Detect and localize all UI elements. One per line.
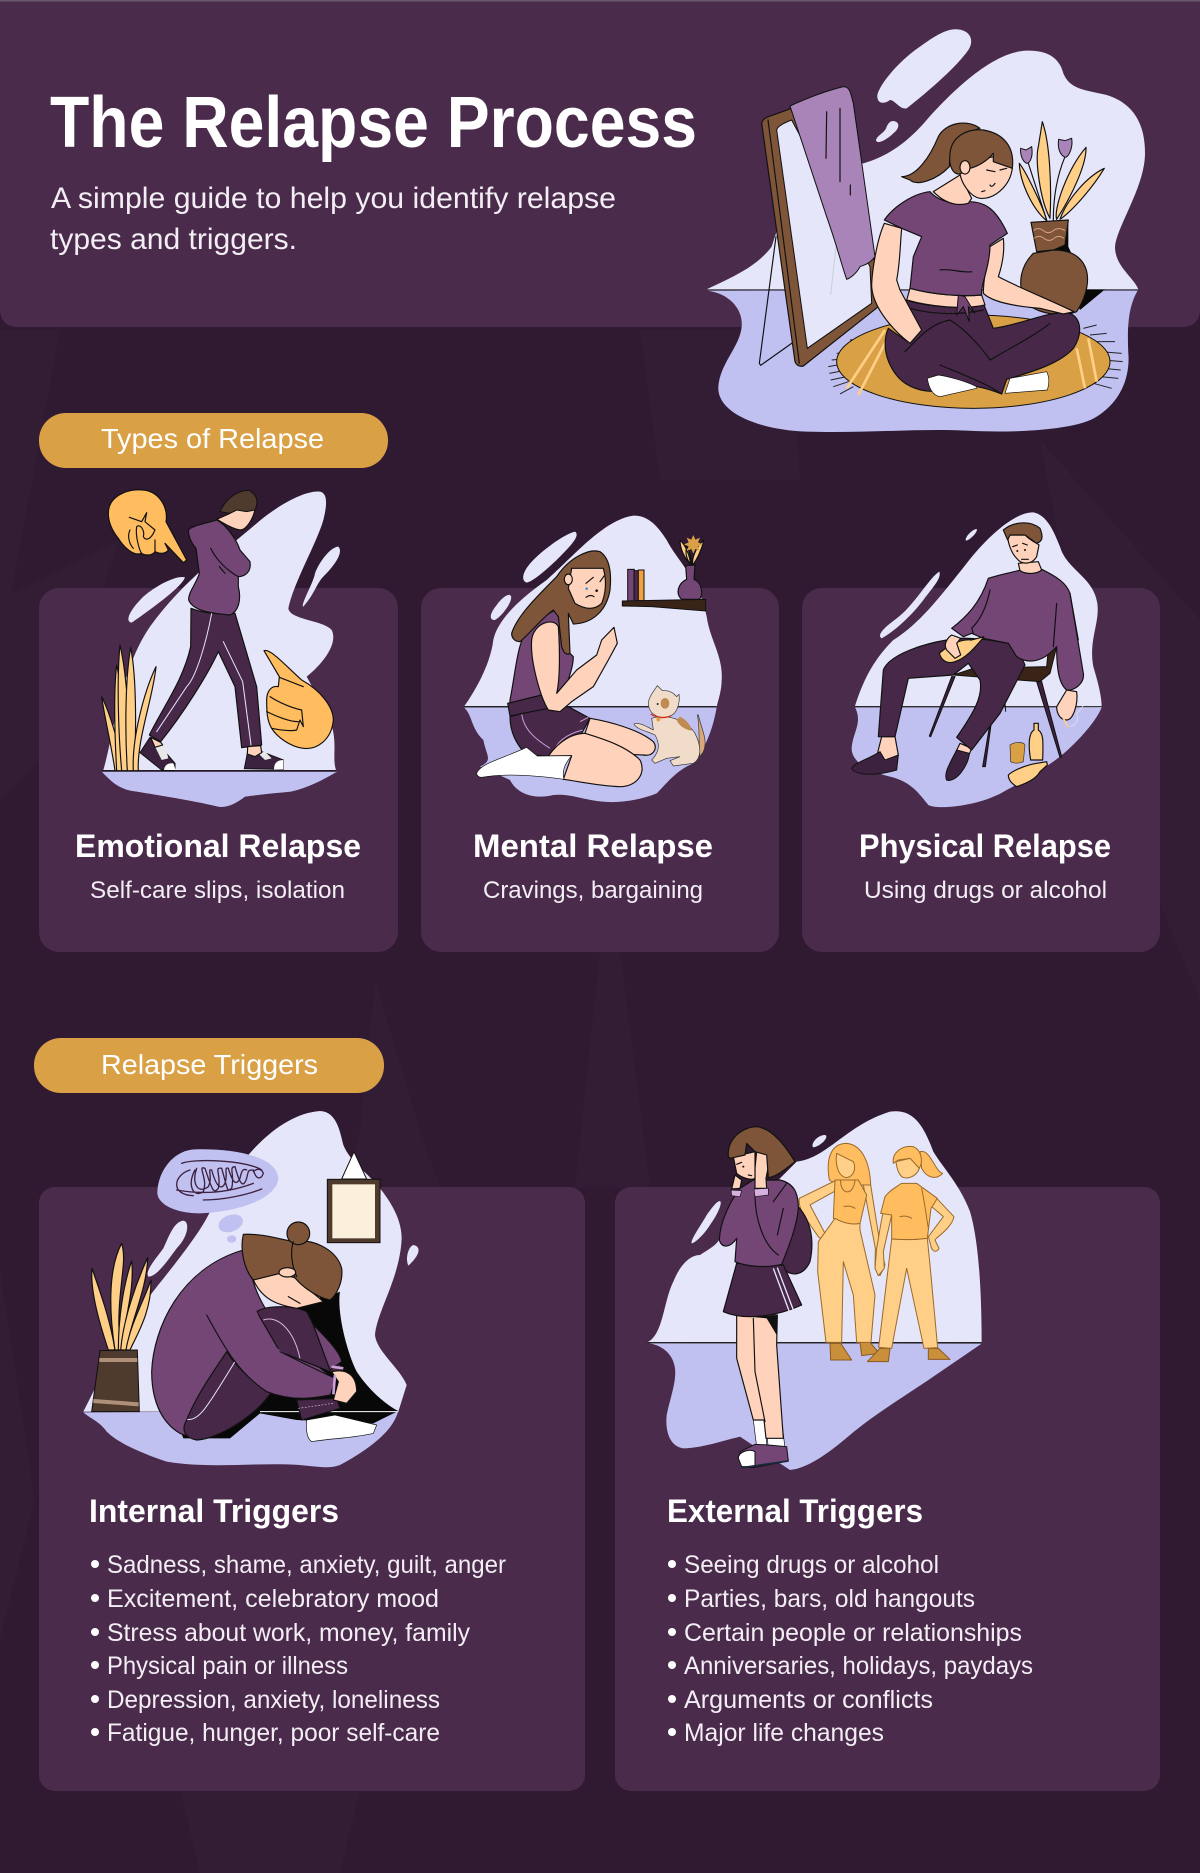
illustration: girl hugging knees with scribble thought [83, 1111, 419, 1467]
chair [929, 610, 1062, 767]
panel: mental relapse [421, 588, 779, 952]
trigger list: Certain people or relationships [684, 1619, 1022, 1647]
seated man [852, 523, 1089, 780]
illustration: woman kneeling with cat [464, 516, 722, 802]
section label: Types of Relapse [39, 413, 388, 468]
plant [102, 645, 156, 771]
panel: external triggers [615, 1187, 1160, 1791]
gossiping woman right [867, 1146, 954, 1362]
panel: emotional relapse [39, 588, 398, 952]
walking man [140, 491, 283, 770]
pointing fist top [108, 490, 187, 563]
header panel [0, 0, 1200, 327]
trigger list: Excitement, celebratory mood [107, 1585, 439, 1613]
covering-ears girl [719, 1127, 802, 1468]
trigger list: Physical pain or illness [107, 1652, 348, 1680]
description: Using drugs or alcohol [864, 877, 1107, 904]
subtitle: A simple guide to help you identify relapse [51, 182, 616, 215]
seated woman [872, 123, 1080, 397]
trigger list [91, 1551, 506, 1747]
trigger list: Parties, bars, old hangouts [684, 1585, 975, 1613]
section label: Relapse Triggers [34, 1038, 384, 1093]
section label: Types of Relapse: Types of Relapse [101, 423, 324, 454]
kneeling woman [477, 551, 655, 787]
rug [828, 315, 1123, 408]
thought bubble [157, 1149, 278, 1243]
shadow [178, 1292, 398, 1438]
title: The Relapse Process [50, 83, 697, 163]
backpack [773, 1205, 812, 1274]
subtitle [50, 182, 616, 256]
description: Self-care slips, isolation [90, 877, 345, 904]
heading: External Triggers [667, 1493, 923, 1529]
trigger list: Fatigue, hunger, poor self-care [107, 1719, 440, 1747]
gossiping woman left [799, 1143, 885, 1360]
trigger list: Anniversaries, holidays, paydays [684, 1652, 1033, 1680]
heading: Emotional Relapse [75, 828, 361, 864]
vase with flowers [1019, 122, 1105, 315]
pointing fist bottom [264, 650, 333, 749]
trigger list: Sadness, shame, anxiety, guilt, anger [107, 1551, 506, 1579]
trigger list: Seeing drugs or alcohol [684, 1551, 939, 1579]
illustration: man on chair with bottles [852, 512, 1102, 807]
illustration: woman sitting by mirror [707, 29, 1145, 432]
crouching girl [152, 1222, 377, 1442]
cat [634, 686, 705, 766]
illustration: walking man with pointing hands [102, 490, 340, 807]
towel [790, 87, 875, 279]
trigger list: Depression, anxiety, loneliness [107, 1686, 440, 1714]
shelf with books and vase [622, 535, 706, 611]
trigger list [668, 1551, 1033, 1747]
panel: internal triggers [39, 1187, 585, 1791]
trigger list: Arguments or conflicts [684, 1686, 933, 1714]
potted plant [92, 1243, 151, 1412]
description: Cravings, bargaining [483, 877, 703, 904]
heading: Internal Triggers [89, 1493, 339, 1529]
panel: physical relapse [802, 588, 1160, 952]
subtitle: types and triggers. [50, 223, 297, 256]
trigger list: Major life changes [684, 1719, 884, 1747]
illustration: girl covering ears with gossiping women [647, 1111, 982, 1470]
section label: Relapse Triggers: Relapse Triggers [101, 1049, 318, 1080]
trigger list: Stress about work, money, family [107, 1619, 470, 1647]
mirror [759, 108, 878, 366]
heading: Physical Relapse [859, 828, 1111, 864]
bottles [1008, 723, 1047, 787]
heading: Mental Relapse [473, 828, 713, 864]
wall picture [327, 1152, 380, 1243]
